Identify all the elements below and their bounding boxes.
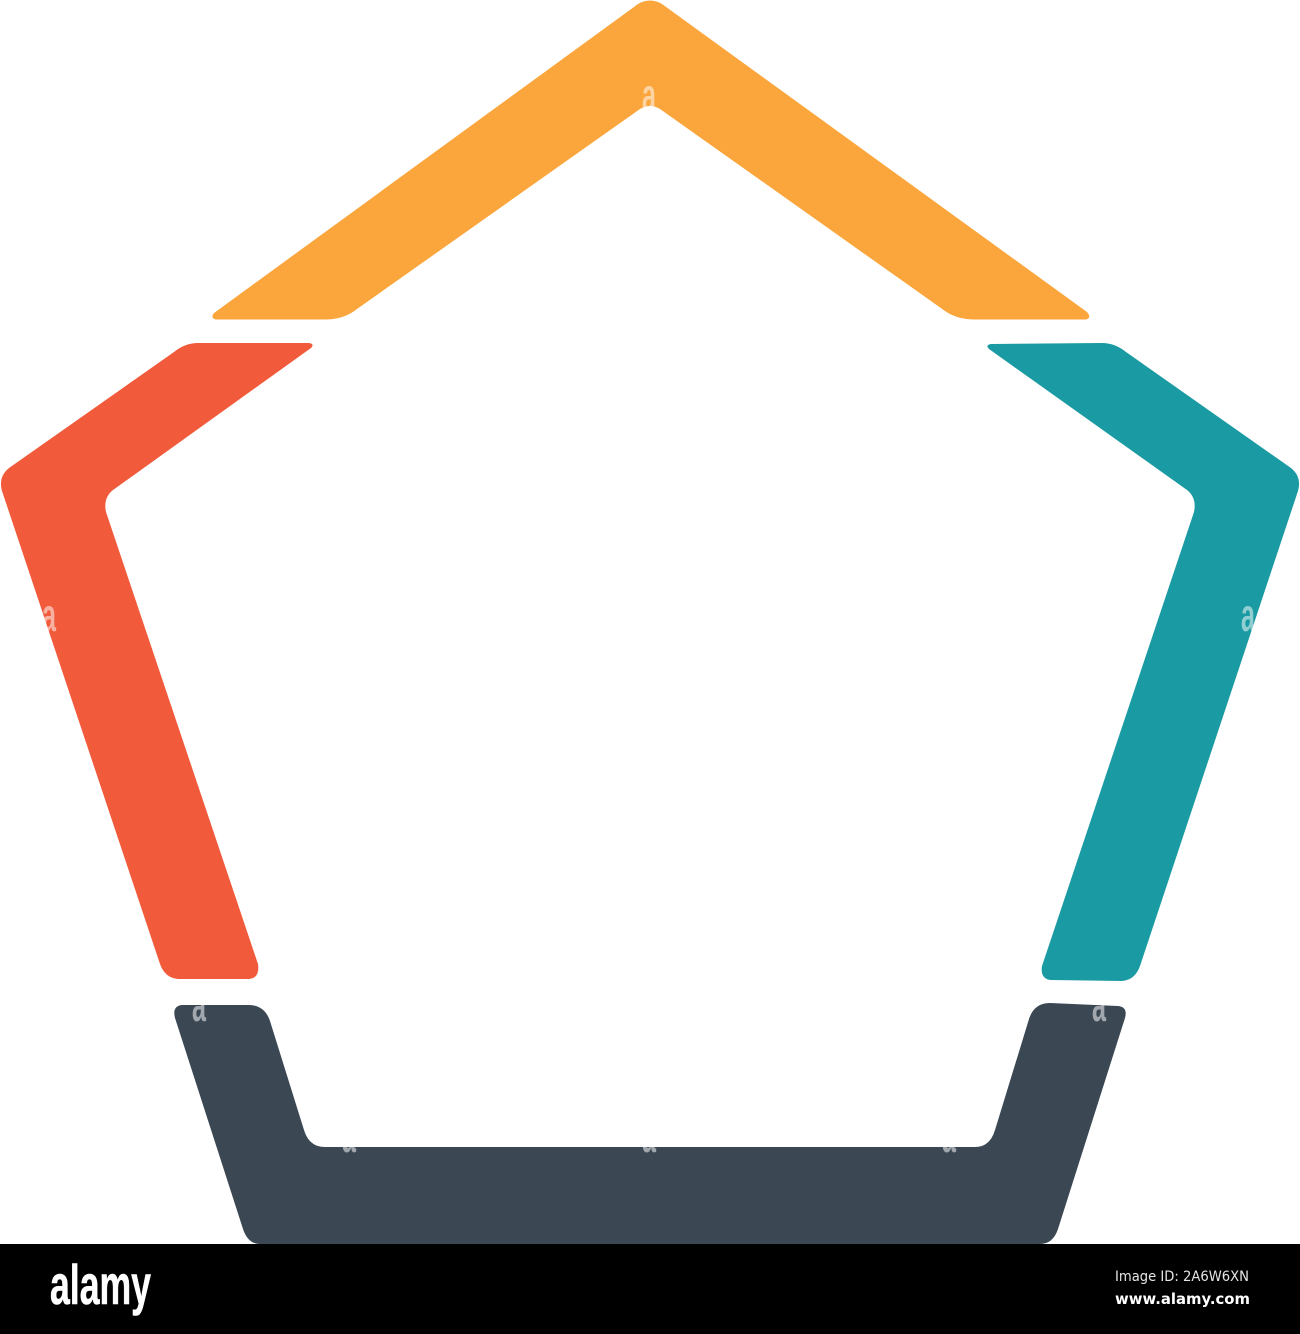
segment: bottom slate: a	[942, 1110, 956, 1162]
segment: right teal	[987, 343, 1299, 981]
alamy logo: alamy	[50, 1253, 151, 1316]
segment: left red	[1, 343, 313, 979]
segment: left red: a	[42, 589, 56, 641]
image id: Image ID: 2A6W6XN	[1115, 1269, 1249, 1285]
segment: right teal: a	[1241, 589, 1255, 641]
segment: top orange: a	[642, 69, 656, 121]
segment: bottom slate	[174, 979, 1126, 1244]
footer bar	[0, 1244, 1300, 1334]
segment: bottom slate: a	[342, 1110, 356, 1162]
segment: bottom slate: a	[192, 979, 206, 1031]
segment: bottom slate: a	[1092, 979, 1106, 1031]
segment: top orange	[212, 0, 1089, 320]
website: www.alamy.com	[1115, 1290, 1250, 1308]
segment: bottom slate: a	[642, 1110, 656, 1162]
